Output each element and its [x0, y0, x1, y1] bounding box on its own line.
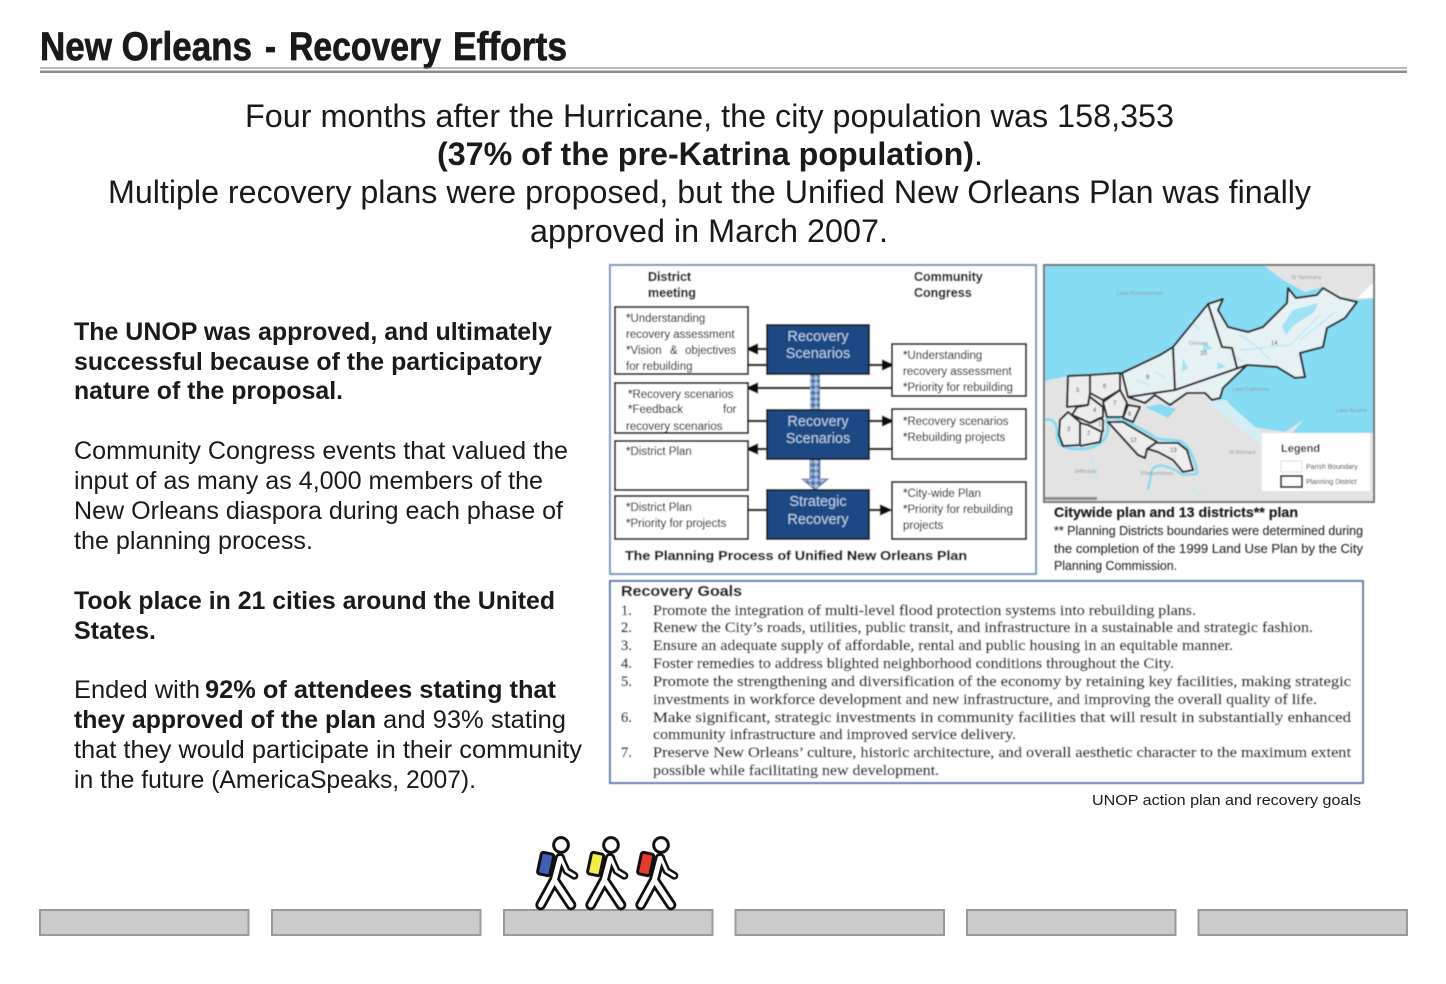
left box text: *Recovery scenarios — [628, 389, 734, 401]
panel: district map — [1044, 265, 1374, 573]
map caption: Planning Commission. — [1054, 559, 1177, 573]
map labels: 2 — [1087, 431, 1091, 437]
river and channels — [1045, 418, 1205, 497]
paragraph: Community Congress: input of as many as 4,000 members of the — [74, 467, 543, 495]
map labels: 3 — [1067, 427, 1071, 433]
map labels: 12 — [1130, 438, 1137, 444]
intro text block — [108, 98, 1311, 249]
map labels: Jefferson — [1074, 469, 1097, 475]
progress bar segments — [40, 910, 1407, 935]
map labels: Lake Pontchartrain — [1117, 291, 1163, 297]
goals list: investments in workforce development and new infrastructure, and improving the overall quality of life. — [653, 692, 1317, 708]
left box text: for — [723, 404, 737, 416]
goals list: 6. — [621, 710, 632, 726]
map labels: Plaquemines — [1141, 471, 1173, 477]
marsh water inside the parish — [1182, 303, 1318, 372]
map labels: St Tammany — [1291, 275, 1322, 281]
paragraph: approval figures: in the future (AmericaSpeaks, 2007). — [74, 766, 476, 794]
map caption — [1054, 505, 1364, 573]
paragraph: UNOP approval: The UNOP was approved, and ultimately — [74, 318, 552, 346]
goals list: community infrastructure and improved service delivery. — [653, 727, 1016, 743]
left box text: objectives — [685, 345, 736, 357]
panel: planning process flowchart — [610, 265, 1036, 574]
map labels: 8 — [1128, 412, 1132, 418]
goals list: Make significant, strategic investments in community facilities that will result in substantially enhanced — [653, 710, 1352, 726]
goals list: 4. — [621, 656, 632, 672]
flowchart caption: The Planning Process of Unified New Orleans Plan — [625, 548, 967, 563]
channel patches and peninsula — [1145, 400, 1303, 446]
marsh channels — [1135, 312, 1335, 385]
goals list: 5. — [621, 674, 632, 690]
map labels: 4 — [1093, 408, 1097, 414]
map base — [1044, 265, 1374, 502]
center box text: Scenarios — [786, 346, 850, 362]
icon: hiker with red backpack — [637, 838, 674, 905]
goals list: Renew the City’s roads, utilities, public transit, and infrastructure in a sustainable and strategic fashion. — [653, 620, 1313, 636]
goals list: 2. — [621, 620, 632, 636]
left box text: recovery assessment — [626, 329, 735, 341]
goals list: possible while facilitating new development. — [653, 763, 939, 779]
map labels: 6 — [1103, 384, 1107, 390]
planning district outlines — [1059, 288, 1357, 472]
connectors and arrows — [748, 345, 892, 514]
column headings: District — [648, 270, 692, 284]
map caption: Citywide plan and 13 districts** plan — [1054, 505, 1298, 520]
goals list: 1. — [621, 603, 632, 619]
right box text: projects — [903, 520, 944, 532]
title: - — [265, 25, 276, 69]
lake and gulf water — [1045, 265, 1373, 433]
map labels: 10 — [1200, 351, 1207, 357]
image caption: UNOP action plan and recovery goals — [1092, 793, 1361, 809]
white corner — [1357, 283, 1373, 298]
left box text: *Priority for projects — [626, 518, 727, 530]
map labels: 1 — [1098, 422, 1102, 428]
intro text block: (37% of the pre-Katrina population) — [437, 136, 974, 172]
paragraph: Community Congress — [74, 437, 568, 555]
legend — [1262, 433, 1370, 491]
paragraph: approval figures: 92% of attendees stating that — [205, 676, 557, 704]
icon: hiker with yellow backpack — [587, 838, 624, 905]
right box text — [903, 350, 1013, 532]
goals list: Ensure an adequate supply of affordable, rental and public housing in an equitable manner. — [653, 638, 1233, 654]
left box text: *Feedback — [628, 404, 683, 416]
left boxes — [615, 307, 748, 539]
map caption: the completion of the 1999 Land Use Plan by the City — [1054, 542, 1364, 556]
vertical process arrows — [802, 374, 828, 490]
goals list: Foster remedies to address blighted neighborhood conditions throughout the City. — [653, 656, 1174, 672]
right box text: *Priority for rebuilding — [903, 504, 1013, 516]
paragraph: 21 cities: States. — [74, 617, 156, 645]
right box text: recovery assessment — [903, 366, 1012, 378]
paragraph: approval figures: that they would participate in their community — [74, 736, 583, 764]
map labels: 9 — [1146, 375, 1150, 381]
goals list: Promote the strengthening and diversification of the economy by retaining key facilities, making strategic — [653, 674, 1351, 690]
paragraph: approval figures: they approved of the plan — [74, 706, 376, 734]
map labels — [1067, 275, 1367, 477]
left box text: recovery scenarios — [626, 421, 723, 433]
right box text: *Priority for rebuilding — [903, 382, 1013, 394]
left box text — [626, 313, 737, 530]
paragraph: approval figures: and 93% stating — [383, 706, 566, 734]
map labels: 13 — [1170, 448, 1177, 454]
right box text: *Rebuilding projects — [903, 432, 1006, 444]
intro text block: approved in March 2007. — [530, 213, 888, 249]
left box text: *District Plan — [626, 502, 692, 514]
paragraph: approval figures — [74, 676, 583, 794]
right box text: *Understanding — [903, 350, 982, 362]
intro text block: . — [974, 136, 983, 172]
paragraph: UNOP approval: nature of the proposal. — [74, 377, 343, 405]
map labels: Orleans — [1189, 341, 1209, 347]
districts land fill — [1059, 373, 1140, 446]
paragraph: approval figures: Ended with — [74, 676, 200, 704]
title: Recovery — [289, 25, 442, 69]
map labels: 5 — [1076, 388, 1080, 394]
map labels: 7 — [1113, 401, 1117, 407]
left box text: *Vision — [626, 345, 662, 357]
column headings: meeting — [648, 286, 696, 300]
goals list: Promote the integration of multi-level flood protection systems into rebuilding plans. — [653, 603, 1196, 619]
goals list: 7. — [621, 745, 632, 761]
paragraph: 21 cities: Took place in 21 cities around the United — [74, 587, 555, 615]
recovery goals heading: Recovery Goals — [621, 584, 742, 600]
center box text: Recovery — [787, 329, 849, 345]
goals list: Preserve New Orleans’ culture, historic architecture, and overall aesthetic character to the maximum extent — [653, 745, 1351, 761]
map caption: ** Planning Districts boundaries were determined during — [1054, 524, 1363, 538]
panel: recovery goals — [610, 581, 1363, 783]
left column text — [74, 318, 583, 794]
legend: Legend — [1281, 443, 1320, 455]
left box text: *District Plan — [626, 446, 692, 458]
map labels: Lake Borgne — [1336, 408, 1367, 414]
left box text: *Understanding — [626, 313, 705, 325]
icon: three hikers with backpacks — [537, 838, 674, 905]
paragraph: UNOP approval: successful because of the participatory — [74, 348, 542, 376]
center box text: Scenarios — [786, 431, 850, 447]
column headings — [648, 270, 983, 300]
center box text — [786, 329, 850, 528]
center boxes — [767, 325, 869, 539]
map source bar — [1045, 497, 1097, 500]
right boxes — [892, 344, 1026, 539]
intro text block: Multiple recovery plans were proposed, but the Unified New Orleans Plan was finally — [108, 174, 1311, 210]
paragraph: Community Congress: the planning process. — [74, 527, 313, 555]
center box text: Strategic — [789, 494, 847, 510]
title: New Orleans — [40, 25, 252, 69]
center box text: Recovery — [787, 414, 849, 430]
column headings: Community — [914, 270, 983, 284]
paragraph: UNOP approval — [74, 318, 552, 405]
goals list: 3. — [621, 638, 632, 654]
map labels: 14 — [1271, 341, 1278, 347]
map labels: Lake Catherine — [1232, 387, 1269, 393]
icon: hiker with blue backpack — [537, 838, 574, 905]
column headings: Congress — [914, 286, 972, 300]
paragraph: 21 cities — [74, 587, 555, 645]
title: Efforts — [453, 25, 567, 69]
right box text: *City-wide Plan — [903, 488, 981, 500]
paragraph: Community Congress: New Orleans diaspora during each phase of — [74, 497, 563, 525]
center box text: Recovery — [787, 512, 849, 528]
map labels: St Bernard — [1229, 450, 1255, 456]
intro text block: Four months after the Hurricane, the city population was 158,353 — [245, 98, 1174, 134]
title — [40, 25, 1407, 73]
right box text: *Recovery scenarios — [903, 416, 1009, 428]
legend: Planning District — [1306, 479, 1357, 486]
left box text: for rebuilding — [626, 361, 692, 373]
legend: Parish Boundary — [1306, 464, 1358, 471]
parish land — [1122, 288, 1357, 405]
paragraph: Community Congress: Community Congress events that valued the — [74, 437, 568, 465]
goals list — [621, 603, 1352, 779]
left box text: & — [670, 345, 678, 357]
